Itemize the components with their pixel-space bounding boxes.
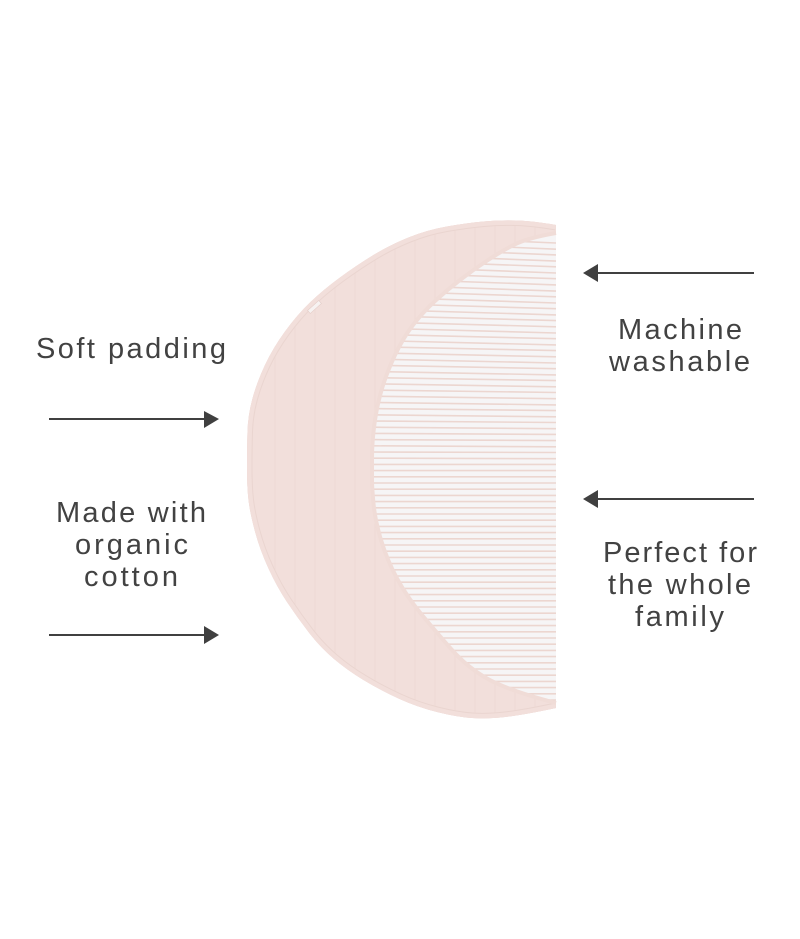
mat sewn label tag — [308, 300, 321, 314]
label: Made with organic cotton: cotton — [84, 561, 178, 593]
label: Soft padding: Soft padding — [36, 333, 226, 365]
label: Made with organic cotton — [56, 497, 206, 593]
label: Machine washable — [608, 314, 750, 378]
label: Perfect for the whole family: the whole — [608, 569, 751, 601]
mat striped underside — [365, 225, 556, 710]
arrow: organic cotton — [49, 626, 219, 644]
label: Machine washable: washable — [608, 346, 750, 378]
label: Perfect for the whole family: family — [635, 601, 724, 633]
arrow: soft padding — [49, 411, 219, 428]
arrow: whole family — [583, 490, 754, 508]
label: Perfect for the whole family — [603, 537, 757, 633]
mat outer pink fabric — [240, 215, 560, 725]
label: Made with organic cotton: organic — [75, 529, 188, 561]
label: Made with organic cotton: Made with — [56, 497, 206, 529]
label: Perfect for the whole family: Perfect for — [603, 537, 757, 569]
mat inner binding edge — [372, 233, 556, 703]
quilted round mat — [240, 215, 560, 725]
label: Machine washable: Machine — [618, 314, 742, 346]
arrow: machine washable — [583, 264, 754, 282]
